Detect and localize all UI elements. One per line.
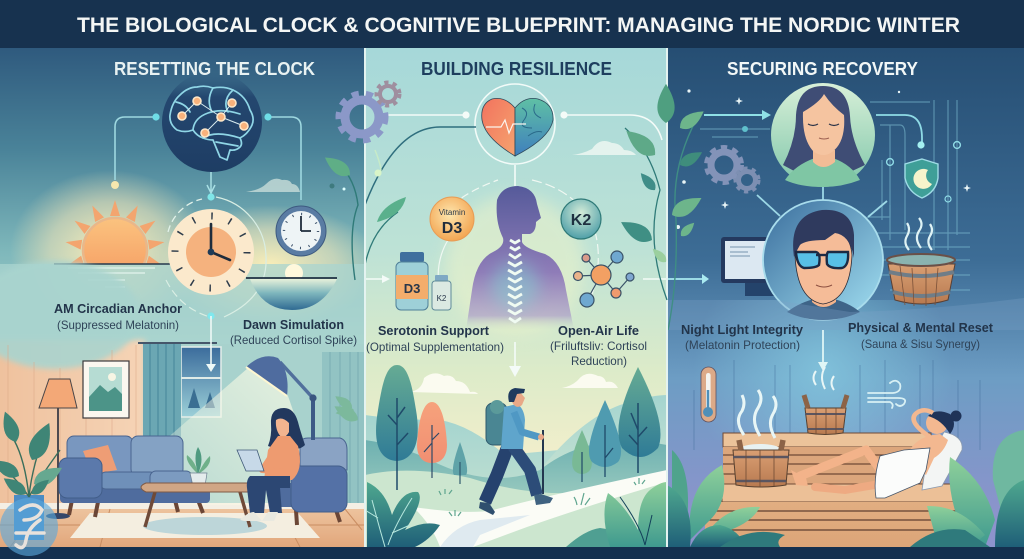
panel: securing recovery (667, 48, 1024, 547)
arrow: to sleeping face (704, 110, 771, 120)
icon: K2 capsule (561, 199, 601, 239)
vine with leaves at panel boundary (617, 84, 675, 300)
small grass tufts (439, 478, 645, 516)
icon: brain in circle (162, 72, 262, 172)
title bar (0, 0, 1024, 48)
label: Physical and Mental Reset: (Sauna & Sisu Synergy) (861, 337, 980, 351)
icon: monitor (721, 237, 791, 296)
plants: bottom left (667, 450, 785, 547)
room: desk lamp (246, 356, 317, 440)
figure: human silhouette with spine (466, 186, 574, 330)
panel: building resilience (365, 48, 667, 547)
sauna: wooden benches (705, 433, 970, 547)
label: Dawn Simulation (230, 320, 356, 346)
plants: bottom right (910, 430, 1024, 547)
label: Night Light Integrity (681, 322, 804, 352)
heading: securing recovery: SECURING RECOVERY (727, 59, 918, 79)
figure: reclining woman in towel (791, 410, 962, 498)
icon: vitamin D3 capsule: D3 (442, 220, 462, 237)
room: sofa (59, 436, 210, 517)
connector: brain to wall clock (264, 113, 301, 200)
label: Open-Air Life (550, 323, 647, 368)
room: left potted plant (0, 409, 66, 540)
room: armchair (280, 438, 348, 526)
icon: gears (707, 148, 758, 191)
foreground plants (365, 482, 667, 547)
icon: cloud (246, 179, 300, 192)
arrow: to monitor (667, 274, 709, 284)
label: Night Light Integrity: Night Light Integrity (681, 322, 804, 337)
sauna wall slats (694, 360, 980, 450)
label: Serotonin Support (366, 323, 504, 354)
icon: heart and brain (475, 84, 555, 164)
room: coffee table (141, 483, 252, 527)
room: potted plant on table (187, 447, 210, 486)
label: Physical and Mental Reset: Physical & Mental Reset (848, 320, 994, 335)
arrows across panel (365, 275, 667, 377)
label: Serotonin Support: Serotonin Support (378, 323, 490, 338)
icon: shield with moon (905, 159, 938, 198)
icon: sparkle dots (676, 89, 971, 229)
icon: K2 bottle: K2 (437, 294, 447, 303)
icon: vitamin D3 capsule (430, 197, 474, 241)
connectors around heart (386, 111, 662, 186)
icon: K2 bottle (432, 275, 451, 310)
panel dividers (364, 48, 668, 547)
icon: D3 bottle: D3 (404, 281, 420, 296)
room: floor and rug (0, 503, 365, 547)
icon: wind lines (868, 381, 905, 408)
arrow: down into window (206, 316, 216, 372)
icon: man with blue light glasses (763, 200, 883, 320)
panel: resetting the clock (0, 48, 380, 547)
heading: building resilience: BUILDING RESILIENCE (421, 59, 612, 79)
room: framed picture (83, 361, 129, 418)
room: wall (0, 261, 365, 515)
icon: thermometer (701, 367, 716, 422)
icon: vitamin D3 capsule: Vitamin (439, 208, 465, 217)
label: Dawn Simulation: (Reduced Cortisol Spike) (230, 333, 357, 347)
connector: brain to sun (111, 113, 160, 189)
icon: cloud (572, 141, 636, 155)
room: side leaves (334, 396, 358, 422)
path through landscape (413, 470, 667, 547)
trees (376, 365, 660, 490)
label: Open-Air Life: Reduction) (571, 354, 627, 368)
icon: molecule (574, 251, 634, 307)
connector: face to shield (876, 115, 960, 202)
arrow: brain to clock (207, 172, 215, 201)
label: Physical and Mental Reset (848, 320, 994, 351)
icon: K2 capsule: K2 (571, 212, 591, 229)
label: Serotonin Support: (Optimal Supplementation) (366, 340, 504, 354)
watermark logo (0, 498, 58, 556)
connectors between faces (757, 187, 887, 217)
room: light cone from lamp (165, 368, 305, 505)
label: AM Circadian Anchor: AM Circadian Anchor (54, 301, 182, 316)
vine and leaf near panel edge (325, 158, 359, 280)
title: THE BIOLOGICAL CLOCK & COGNITIVE BLUEPRINT: MANAGING THE NORDIC WINTER (77, 14, 960, 37)
label: Night Light Integrity: (Melatonin Protection) (685, 338, 800, 352)
icon: dawn over water (246, 264, 337, 310)
landscape hills (365, 395, 667, 547)
label: Open-Air Life: (Friluftsliv: Cortisol (550, 339, 647, 353)
room: lower band (667, 298, 1024, 330)
vine: dark curve to heart (365, 127, 476, 205)
room: window and curtain (138, 342, 221, 437)
icon: small wall clock (276, 206, 326, 256)
figure: hiker (479, 388, 553, 515)
label: AM Circadian Anchor: (Suppressed Melatonin) (57, 318, 179, 332)
icon: steaming bucket on seat (733, 390, 789, 487)
leaf and vine left (365, 150, 406, 265)
vine with leaves at panel edge (668, 106, 707, 330)
icon: D3 bottle (396, 252, 428, 310)
circuit lines (700, 100, 970, 290)
icon: large clock (166, 197, 266, 320)
icons: gears at panel edge (339, 83, 399, 140)
footer bar (0, 547, 1024, 559)
label: Dawn Simulation: Dawn Simulation (243, 317, 344, 332)
icon: sun on horizon (54, 200, 170, 287)
arrow: down to sauna (818, 330, 828, 371)
icon: wooden tub with steam (887, 218, 955, 306)
icon: steaming bucket on top bench (804, 367, 847, 434)
icon: sleeping woman portrait (771, 83, 875, 187)
room: woman with laptop (237, 408, 305, 521)
label: Open-Air Life: Open-Air Life (558, 323, 639, 338)
heading: resetting the clock: RESETTING THE CLOCK (114, 59, 315, 79)
icon: dashed orbit arcs (438, 180, 599, 294)
landscape clouds (410, 373, 618, 394)
room: floor lamp (39, 379, 77, 519)
label: AM Circadian Anchor (54, 301, 182, 332)
